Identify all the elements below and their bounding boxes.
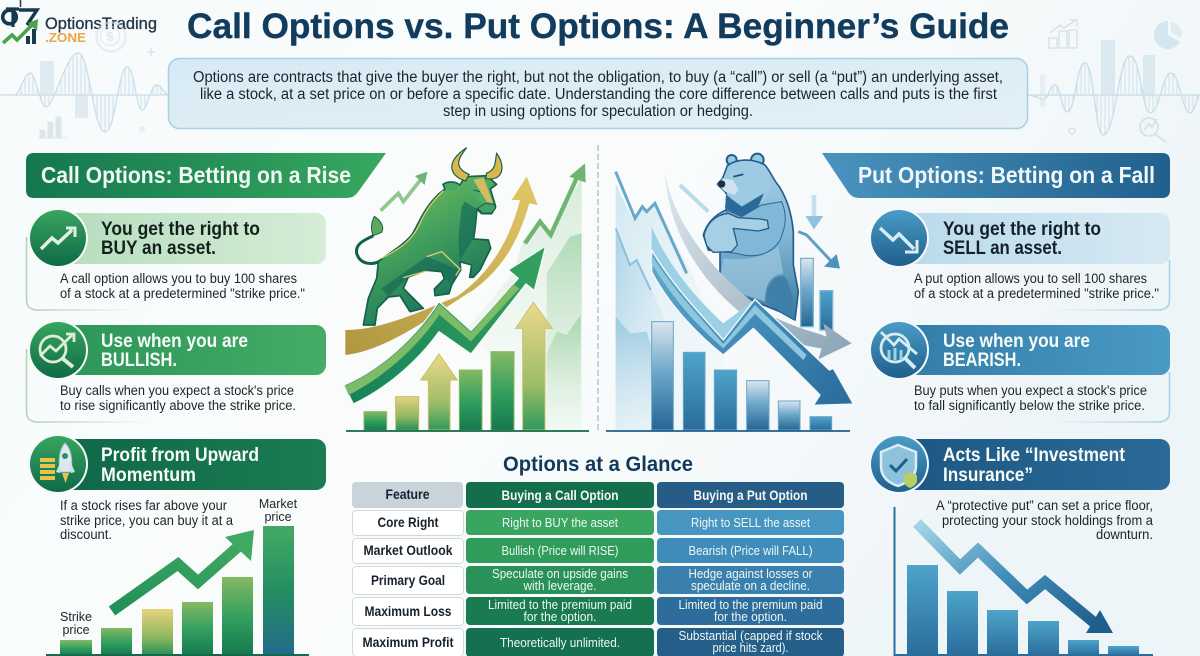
card: right to buy: BUY an asset. xyxy=(101,238,216,259)
table header row: Buying a Call Option xyxy=(502,487,618,503)
card: right to sell: A put option allows you to sell 100 shares xyxy=(914,271,1147,286)
card: right to sell: of a stock at a predetermined "strike price." xyxy=(914,286,1159,301)
small arrows xyxy=(680,185,840,330)
row: maximum profit: price hits zard). xyxy=(712,641,788,655)
icon: magnifier with chart xyxy=(40,334,74,367)
row: primary goal xyxy=(352,566,844,594)
card: use when bearish: Use when you are xyxy=(943,331,1090,352)
bull xyxy=(356,148,502,325)
title: Call Options vs. Put Options: A Beginner’s Guide xyxy=(187,7,1009,46)
card: use when bearish: Buy puts when you expect a stock's price xyxy=(914,383,1147,398)
card: profit from upward momentum: Momentum xyxy=(101,465,196,486)
background mountains and arrows xyxy=(381,163,586,430)
gold bar arrows xyxy=(421,302,552,430)
row: primary goal: speculate on a decline. xyxy=(691,579,810,593)
row: maximum loss xyxy=(352,597,844,626)
icon: shield xyxy=(881,445,917,488)
card: use when bearish: to fall significantly below the strike price. xyxy=(914,398,1145,413)
row: maximum loss: Limited to the premium paid xyxy=(488,598,632,612)
baseline xyxy=(606,430,850,432)
card: use when bullish: BULLISH. xyxy=(101,350,177,371)
card: use when bullish: to rise significantly above the strike price. xyxy=(60,398,296,413)
icon: magnifier with falling chart xyxy=(881,332,917,368)
logo xyxy=(3,0,157,52)
gray arrow xyxy=(665,172,852,359)
banner: put options: Put Options: Betting on a Fall xyxy=(858,162,1155,188)
card: investment insurance: Acts Like “Investment xyxy=(943,445,1126,466)
decoration: right wave, chart icons xyxy=(1028,20,1200,142)
row: market outlook xyxy=(352,538,844,564)
row: maximum profit: Maximum Profit xyxy=(362,635,454,650)
intro text: step in using options for speculation or hedging. xyxy=(443,103,753,120)
card: investment insurance xyxy=(869,434,1170,542)
chart: strike to market price xyxy=(46,497,309,656)
row: primary goal: Speculate on upside gains xyxy=(492,567,628,581)
icon: dollar coin: $ xyxy=(106,29,114,44)
card: use when bullish xyxy=(26,320,326,422)
row: primary goal: with leverage. xyxy=(523,579,596,593)
row: maximum profit: Theoretically unlimited. xyxy=(500,636,620,650)
illustration: bear market xyxy=(606,154,853,431)
baseline xyxy=(346,430,589,432)
big blue arrow xyxy=(652,227,853,405)
label: market price: price xyxy=(264,510,292,524)
big green arrow xyxy=(344,246,546,404)
row: market outlook: Bullish (Price will RISE) xyxy=(502,544,618,558)
row: maximum loss: for the option. xyxy=(714,610,787,624)
chart: protective put xyxy=(894,507,1153,656)
row: core right: Right to SELL the asset xyxy=(691,516,810,530)
label: strike price: Strike xyxy=(60,610,92,624)
illustration: bull market xyxy=(344,148,589,431)
card: profit from upward momentum: If a stock rises far above your xyxy=(60,498,228,513)
card: profit from upward momentum xyxy=(28,434,326,542)
card: profit from upward momentum: discount. xyxy=(60,527,112,542)
card: right to buy: You get the right to xyxy=(101,219,260,240)
card: investment insurance: A “protective put” can set a price floor, xyxy=(936,498,1153,513)
row: core right: Core Right xyxy=(378,515,439,530)
row: maximum loss: Maximum Loss xyxy=(364,604,452,619)
card: profit from upward momentum: strike price, you can buy it at a xyxy=(60,513,234,528)
banner: call options xyxy=(26,153,386,198)
banner: put options xyxy=(822,153,1170,198)
bars xyxy=(652,322,832,430)
panel: call options xyxy=(26,153,386,656)
card: right to sell: SELL an asset. xyxy=(943,238,1062,259)
logo suffix: .ZONE xyxy=(45,30,86,45)
card: investment insurance: protecting your stock holdings from a xyxy=(942,513,1154,528)
intro text xyxy=(193,69,1003,120)
card: use when bearish xyxy=(869,320,1170,422)
card: investment insurance: Insurance” xyxy=(943,465,1033,486)
row: market outlook: Market Outlook xyxy=(364,543,453,558)
card: right to sell xyxy=(869,208,1170,310)
row: core right xyxy=(352,510,844,536)
card: profit from upward momentum: Profit from Upward xyxy=(101,445,259,466)
table header row xyxy=(352,482,844,508)
bars xyxy=(364,352,514,430)
decoration: left wave and bars xyxy=(0,48,168,138)
bear xyxy=(703,154,798,320)
icon: falling arrow xyxy=(880,228,917,252)
gold arrow xyxy=(345,177,538,355)
icon: rising arrow xyxy=(41,228,75,249)
icon: dollar coin xyxy=(96,22,126,52)
row: maximum profit xyxy=(352,628,844,656)
row: maximum loss: Limited to the premium paid xyxy=(678,598,822,612)
row: primary goal: Hedge against losses or xyxy=(688,567,812,581)
row: core right: Right to BUY the asset xyxy=(502,516,618,530)
card: use when bullish: Buy calls when you expect a stock's price xyxy=(60,383,294,398)
icon: coins and rocket xyxy=(40,443,75,483)
intro box xyxy=(168,58,1028,128)
panel: put options xyxy=(822,153,1170,656)
intro text: like a stock, at a set price on or before a specific date. Understanding the core difference between calls and puts is the first xyxy=(200,86,998,103)
arrow: price fall xyxy=(917,523,1113,633)
icon: logo mark xyxy=(3,0,38,44)
card: right to buy: of a stock at a predetermined "strike price." xyxy=(60,286,305,301)
card: investment insurance: downturn. xyxy=(1096,527,1153,542)
table title: Options at a Glance xyxy=(503,453,693,476)
table: options at a glance xyxy=(352,453,844,656)
intro text: Options are contracts that give the buyer the right, but not the obligation, to buy (a “call”) or sell (a “put”) an underlying asset, xyxy=(193,69,1003,86)
banner: call options: Call Options: Betting on a Rise xyxy=(41,162,351,188)
arrow: price rise xyxy=(112,530,254,611)
divider xyxy=(597,145,599,433)
card: right to buy xyxy=(26,208,326,310)
row: primary goal: Primary Goal xyxy=(371,573,445,588)
label: market price: Market xyxy=(259,497,298,511)
row: maximum profit: Substantial (capped if stock xyxy=(678,629,823,643)
card: right to buy: A call option allows you to buy 100 shares xyxy=(60,271,297,286)
logo wordmark: OptionsTrading xyxy=(45,14,157,33)
label: strike price: price xyxy=(62,623,90,637)
table header row: Buying a Put Option xyxy=(694,487,808,503)
mountains and zigzags xyxy=(616,172,723,430)
card: right to sell: You get the right to xyxy=(943,219,1101,240)
row: market outlook: Bearish (Price will FALL) xyxy=(688,544,812,558)
row: maximum loss: for the option. xyxy=(524,610,596,624)
card: use when bullish: Use when you are xyxy=(101,331,248,352)
card: use when bearish: BEARISH. xyxy=(943,350,1021,371)
table header row: Feature xyxy=(386,487,430,502)
